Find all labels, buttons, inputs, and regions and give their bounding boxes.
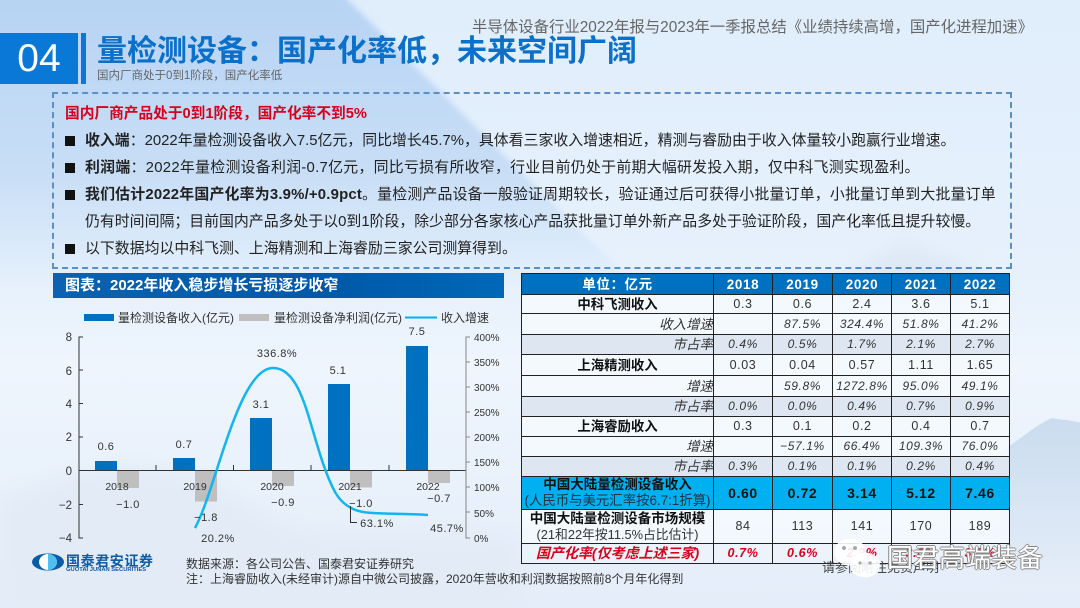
data table: 2022 — [964, 276, 996, 292]
value labels: −0.7 — [427, 493, 451, 505]
right axis labels: 50% — [474, 509, 494, 520]
data table: 0.2 — [852, 419, 872, 433]
right axis labels: 200% — [474, 433, 500, 444]
data table: 0.4% — [965, 459, 995, 473]
category labels: 2021 — [338, 481, 362, 493]
value labels: 0.6 — [98, 441, 114, 453]
subheading: 国内厂商处于0到1阶段，国产化率低 — [97, 70, 282, 82]
combo chart: revenue, net profit and growth — [59, 310, 500, 545]
logo: Guotai Junan Securities — [32, 553, 154, 573]
data table — [521, 273, 1010, 564]
value labels: −1.8 — [194, 512, 218, 524]
data table: 收入增速 — [659, 316, 713, 332]
value labels: 3.1 — [253, 399, 269, 411]
data table: 0.1 — [793, 419, 812, 433]
point: localization continued: 仍有时间间隔；目前国内产品多处于以0到1阶段，除少部分各家核心产品获批量订单外新产品多处于验证阶段，国产化率低且提升较慢。 — [85, 214, 980, 230]
data table: 41.2% — [961, 316, 999, 330]
axes — [79, 337, 466, 538]
data table: 2019 — [786, 276, 819, 292]
data table: 0.3 — [733, 296, 753, 310]
data table: 3.6 — [911, 296, 931, 310]
left axis labels: −2 — [59, 500, 72, 512]
data table: −57.1% — [780, 439, 825, 453]
data table: 0.2% — [906, 459, 936, 473]
data table: 3.0% — [906, 546, 936, 560]
data table: 324.4% — [840, 316, 884, 330]
data table: 84 — [735, 519, 751, 533]
logo: Guotai Junan Securities: GUOTAI JUNAN SECURITIES — [66, 567, 146, 573]
report title top right: 半导体设备行业2022年报与2023年一季报总结《业绩持续高增，国产化进程加速》 — [472, 19, 1033, 36]
main heading: 量检测设备：国产化率低，未来空间广阔 — [97, 35, 637, 68]
net profit bars — [117, 470, 450, 502]
data table: 113 — [792, 519, 813, 533]
data table: 66.4% — [843, 439, 881, 453]
data table: 单位：亿元 — [582, 276, 653, 292]
chart title bar: 图表：2022年收入稳步增长亏损逐步收窄 — [65, 277, 338, 294]
data table: 5.1 — [970, 296, 990, 310]
source note — [186, 557, 683, 586]
legend: 收入增速 — [441, 311, 489, 325]
value labels: 7.5 — [409, 326, 425, 338]
legend — [84, 310, 489, 325]
data table: 0.3 — [733, 419, 753, 433]
data table: 2.4 — [852, 296, 872, 310]
data table: 1272.8% — [836, 378, 888, 392]
right axis labels: 150% — [474, 458, 500, 469]
left axis labels — [59, 332, 73, 545]
data table: 49.1% — [961, 378, 999, 392]
data table: 3.9% — [965, 546, 995, 560]
data table: 0.4% — [728, 337, 758, 351]
data table: 5.12 — [906, 484, 936, 500]
data table: 1.7% — [847, 337, 877, 351]
data table: 51.8% — [902, 316, 940, 330]
data table: 市占率 — [672, 337, 713, 352]
data table: (21和22年按11.5%占比估计) — [537, 526, 698, 542]
logo: Guotai Junan Securities: 国泰君安证券 — [66, 553, 154, 569]
right axis labels: 300% — [474, 383, 500, 394]
left axis labels: 2 — [66, 432, 72, 444]
data table: 1.11 — [908, 358, 934, 372]
right axis labels: 0% — [474, 534, 489, 545]
data table: 0.7% — [728, 546, 758, 560]
data table: 0.0% — [788, 399, 817, 413]
section number badge: 04 — [17, 37, 61, 80]
data table: 1.65 — [967, 358, 993, 372]
chart title bar — [53, 273, 504, 298]
right axis labels: 400% — [474, 333, 500, 344]
data table: 0.60 — [728, 484, 758, 500]
data table: 2020 — [846, 276, 878, 292]
source note: 数据来源：各公司公告、国泰君安证券研究 — [186, 557, 414, 571]
data table: 市占率 — [672, 459, 713, 474]
data table: 0.9% — [965, 399, 995, 413]
watermark: wechat icon — [834, 538, 880, 578]
left axis labels: 0 — [66, 466, 72, 478]
category labels: 2019 — [183, 481, 207, 493]
right axis labels: 350% — [474, 358, 500, 369]
data table: 7.46 — [965, 484, 995, 500]
right axis labels: 250% — [474, 408, 500, 419]
legend: 量检测设备收入(亿元) — [118, 310, 234, 325]
data table: 2021 — [905, 276, 937, 292]
data table: 0.4 — [911, 419, 931, 433]
data table: 0.03 — [730, 358, 756, 372]
value labels: 45.7% — [430, 523, 464, 535]
panel: key points — [52, 92, 1012, 269]
data table: 0.72 — [788, 484, 817, 500]
value labels: −1.0 — [349, 498, 373, 510]
left axis labels: −4 — [59, 533, 73, 545]
data table: 2.7% — [965, 337, 995, 351]
data table: 0.7 — [970, 419, 990, 433]
leader line — [350, 506, 357, 522]
legend: 量检测设备净利润(亿元) — [274, 310, 402, 325]
data table: 上海睿励收入 — [577, 419, 658, 434]
category labels — [105, 481, 440, 493]
category labels: 2022 — [416, 481, 440, 493]
data table: 0.3% — [728, 459, 758, 473]
data table: 59.8% — [784, 378, 821, 392]
data table: 170 — [910, 519, 932, 533]
accent bar — [81, 33, 86, 84]
data table: 0.5% — [788, 337, 817, 351]
data table: 中国大陆量检测设备收入 — [543, 477, 692, 492]
growth line — [195, 368, 428, 528]
data table: 0.4% — [847, 399, 877, 413]
data table: 0.6 — [793, 296, 812, 310]
data table: 国产化率(仅考虑上述三家) — [536, 545, 699, 561]
value labels — [98, 326, 464, 545]
point: localization estimate: 我们估计2022年国产化率为3.9%/+0.9pct。量检测产品设备一般验证周期较长，验证通过后可获得小批量订单，小批量订单到大批量订单 — [85, 187, 996, 203]
value labels: −1.0 — [116, 499, 140, 511]
right axis labels — [474, 333, 500, 545]
point: profit: 利润端：2022年量检测设备利润-0.7亿元，同比亏损有所收窄，行业目前仍处于前期大幅研发投入期，仅中科飞测实现盈利。 — [85, 160, 920, 176]
source note: 注：上海睿励收入(未经审计)源自中微公司披露，2020年营收和利润数据按照前8个月年化得到 — [186, 572, 683, 586]
data table: 95.0% — [902, 378, 940, 392]
data table: 141 — [851, 519, 873, 533]
data table: 0.1% — [788, 459, 817, 473]
watermark: account name: 国君高端装备 — [887, 543, 1043, 573]
left axis labels: 8 — [66, 332, 72, 344]
data table: 市占率 — [672, 399, 713, 414]
data table: 87.5% — [784, 316, 821, 330]
data table: 增速 — [686, 378, 713, 394]
key points headline: 国内厂商产品处于0到1阶段，国产化率不到5% — [65, 106, 367, 122]
data table: 中国大陆量检测设备市场规模 — [530, 510, 705, 526]
category labels: 2018 — [105, 481, 129, 493]
data table: 0.04 — [789, 358, 816, 372]
value labels: 0.7 — [176, 439, 192, 451]
data table: 增速 — [686, 439, 713, 454]
data table: 上海精测收入 — [577, 358, 658, 372]
revenue bars — [95, 346, 428, 470]
data table: 76.0% — [961, 439, 999, 453]
data table: 0.6% — [787, 546, 818, 560]
data table: 2.1% — [906, 337, 936, 351]
value labels: 20.2% — [201, 533, 235, 545]
data table: 0.1% — [847, 459, 877, 473]
point: revenue: 收入端：2022年量检测设备收入7.5亿元，同比增长45.7%，具体看三家收入增速相近，精测与睿励由于收入体量较小跑赢行业增速。 — [85, 133, 955, 149]
data table: 0.0% — [728, 399, 758, 413]
data table: 109.3% — [899, 439, 943, 453]
data table: 2018 — [727, 276, 759, 292]
category labels: 2020 — [260, 481, 284, 493]
data table: 0.7% — [906, 399, 936, 413]
point: data basis: 以下数据均以中科飞测、上海精测和上海睿励三家公司测算得到。 — [85, 241, 517, 257]
data table: (人民币与美元汇率按6.7:1折算) — [524, 493, 710, 508]
data table: 2.2% — [847, 546, 877, 560]
value labels: 5.1 — [330, 365, 346, 377]
value labels: 63.1% — [360, 518, 394, 530]
data table: 189 — [969, 519, 991, 533]
left axis labels: 6 — [66, 366, 72, 378]
left axis labels: 4 — [66, 399, 73, 411]
data table: 中科飞测收入 — [577, 296, 658, 312]
value labels: −0.9 — [271, 497, 295, 509]
right axis labels: 100% — [474, 483, 500, 494]
data table: 3.14 — [847, 484, 877, 500]
section number badge — [0, 33, 78, 84]
value labels: 336.8% — [257, 348, 297, 360]
data table: 0.57 — [849, 358, 875, 372]
disclaimer: 请参阅附注免责声明 — [822, 560, 939, 575]
